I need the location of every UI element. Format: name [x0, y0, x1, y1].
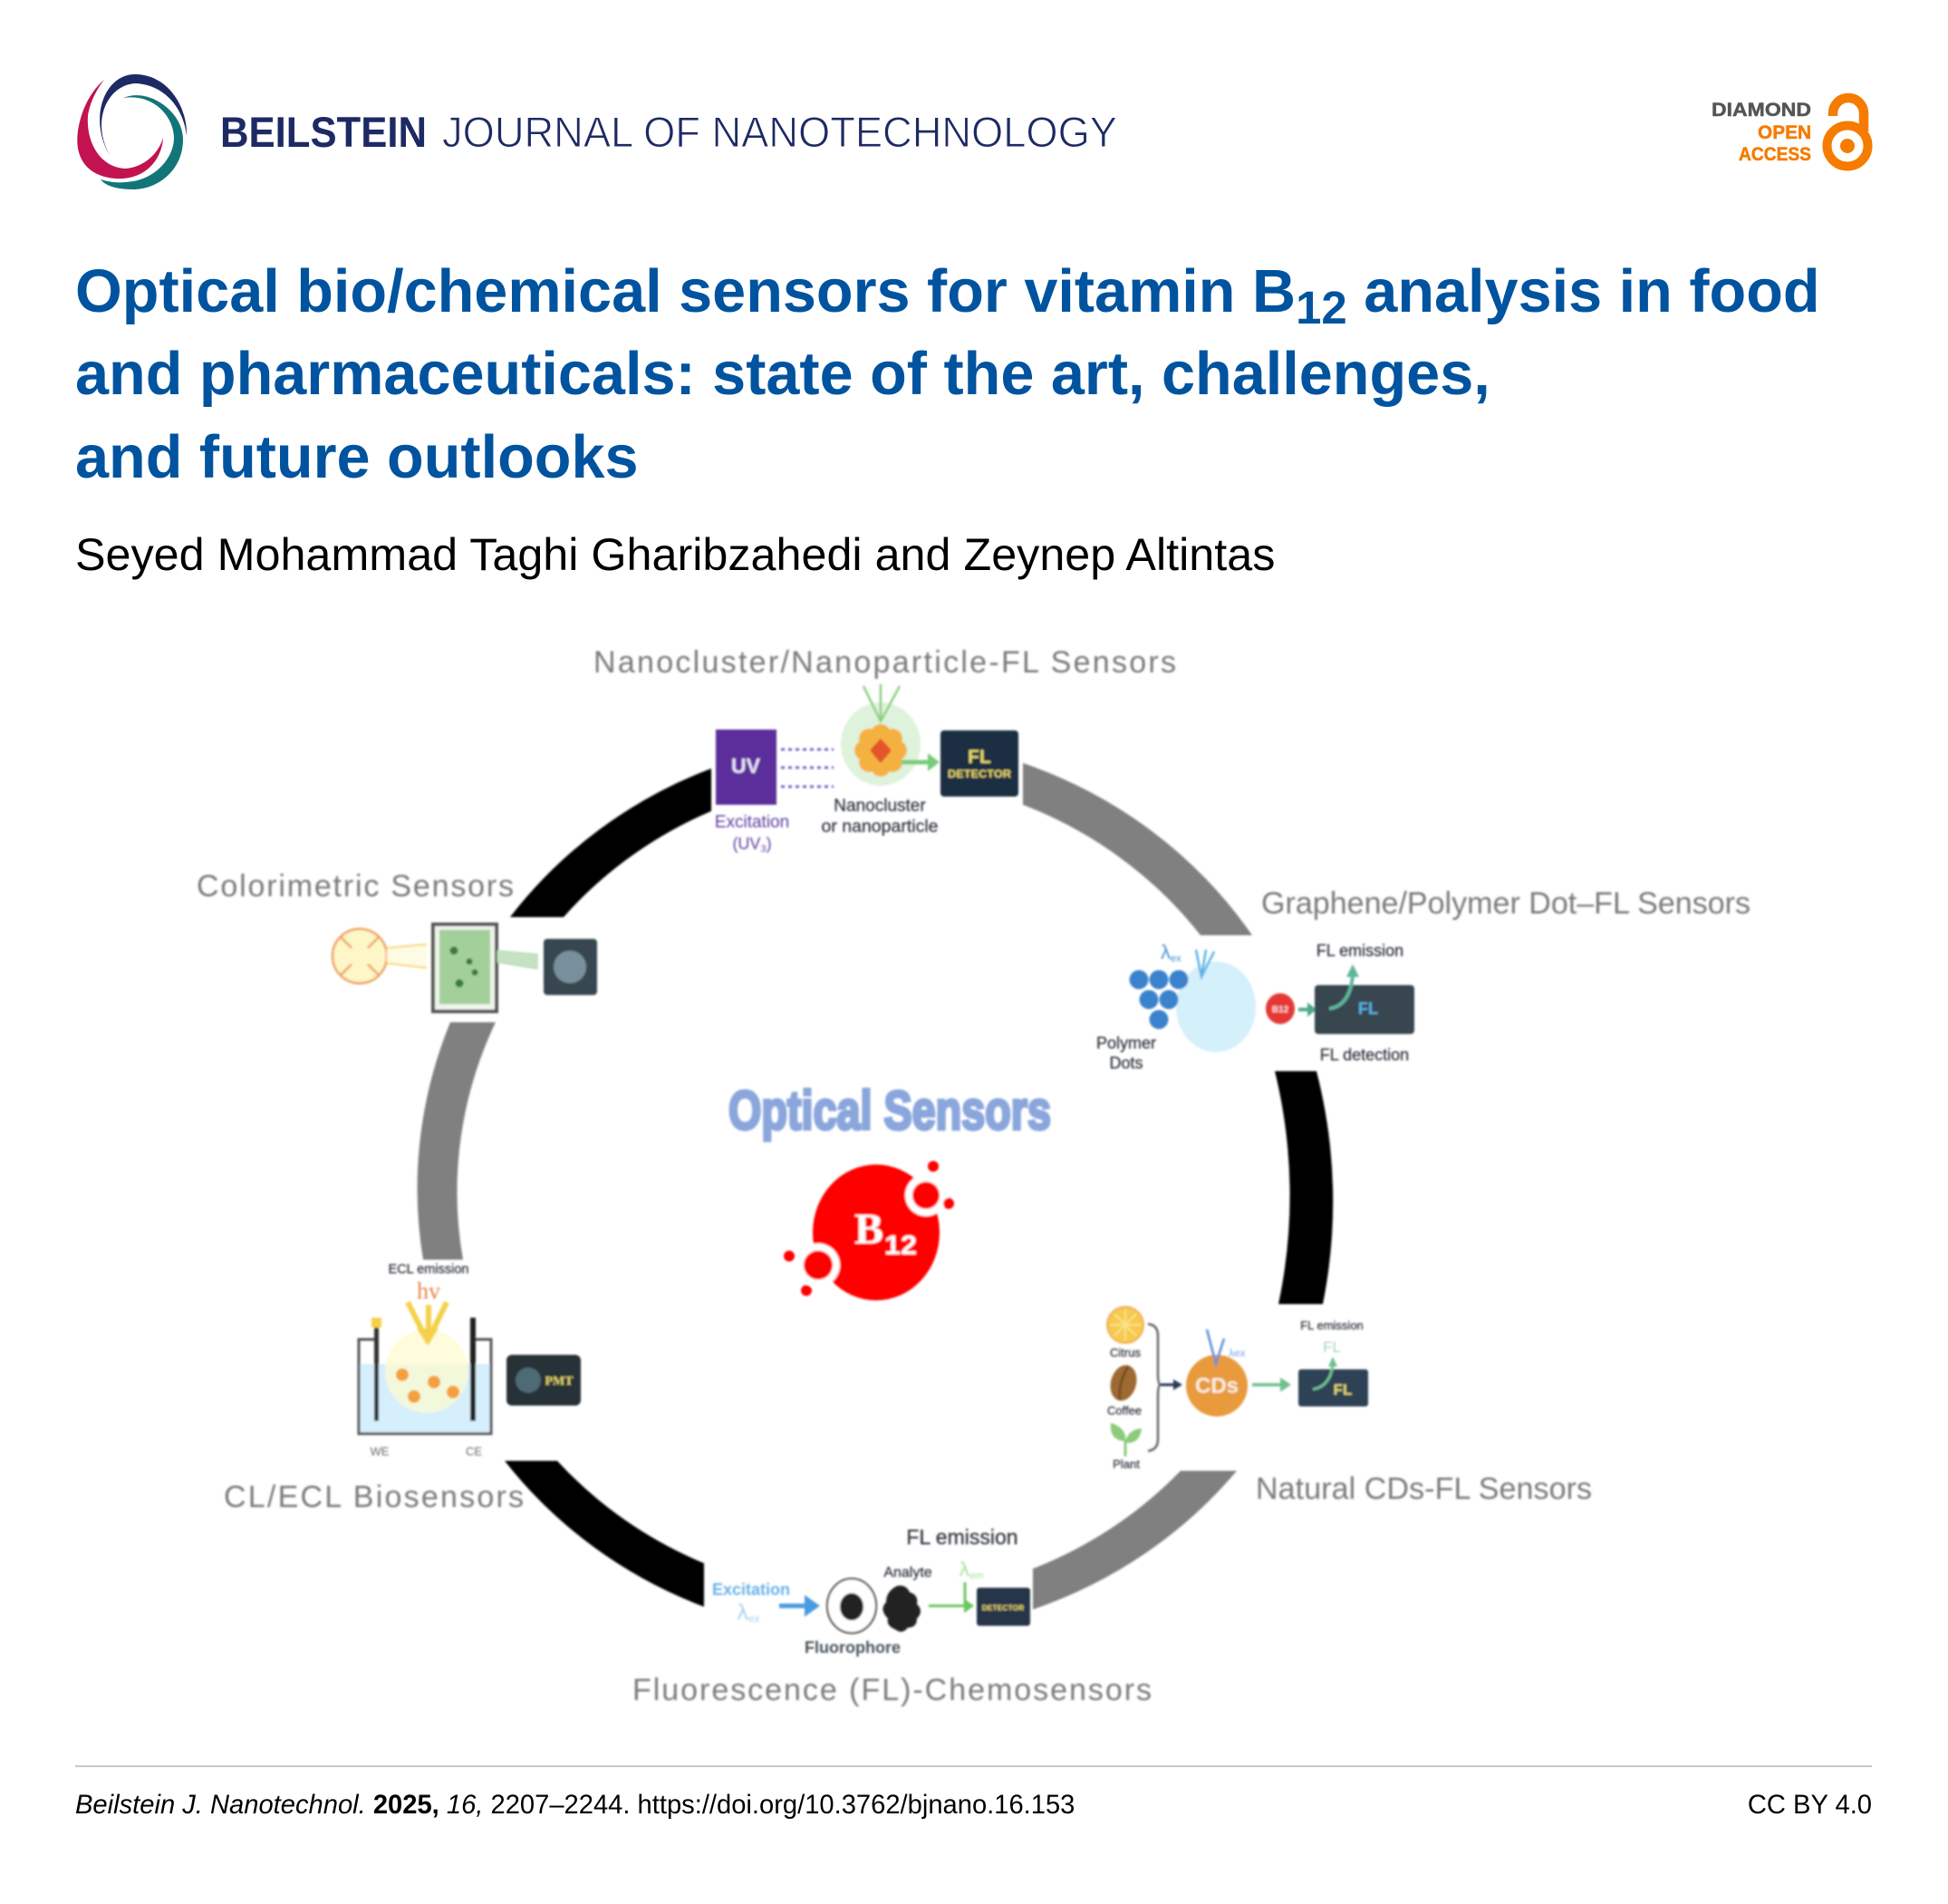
polymer droplet [1176, 962, 1256, 1052]
captions: or nanoparticle [821, 817, 939, 836]
emission captions: ECL emission [389, 1262, 468, 1277]
reagent particles [396, 1368, 459, 1403]
icon: citrus [1107, 1307, 1143, 1343]
ring segment: top left [510, 768, 711, 917]
captions: Excitation [715, 813, 789, 832]
polymer dots [1129, 970, 1189, 1029]
B12 marker [1266, 993, 1295, 1024]
emission captions: FL emission [1300, 1319, 1364, 1332]
source captions [1107, 1346, 1142, 1471]
captions: Dots [1109, 1054, 1143, 1072]
ring segment: bottom right [1033, 1471, 1237, 1609]
FL detector: DETECTOR [948, 768, 1011, 780]
captions [715, 797, 939, 855]
heading: Colorimetric Sensors [197, 869, 514, 904]
journal name: JOURNAL OF NANOTECHNOLOGY [442, 108, 1117, 156]
badge text: ACCESS [1739, 144, 1811, 165]
FL detector [1298, 1357, 1368, 1406]
heading: CL/ECL Biosensors [224, 1480, 524, 1514]
captions: FL emission [1316, 942, 1403, 960]
heading: Graphene/Polymer Dot–FL Sensors [1261, 886, 1750, 921]
captions: Polymer [1096, 1034, 1156, 1052]
light emission arrows [408, 1302, 447, 1346]
badge text: OPEN [1758, 122, 1811, 143]
emission captions: hv [417, 1278, 440, 1304]
emission captions: WE [371, 1445, 390, 1458]
CDs circle: CDs [1195, 1374, 1239, 1398]
ring segment: bottom left [505, 1461, 704, 1607]
title: and future outlooks [75, 424, 639, 491]
captions: FL emission [906, 1525, 1018, 1549]
luminescent glow [385, 1329, 468, 1413]
emission arrow [929, 1582, 974, 1613]
PMT detector [506, 1355, 581, 1406]
electrolyte [359, 1364, 491, 1434]
excitation label [712, 1580, 790, 1625]
title: analysis in food [1347, 258, 1820, 325]
citation: Beilstein J. Nanotechnol. 2025, 16, 2207–2244. https://doi.org/10.3762/bjnano.16.153 [75, 1791, 1075, 1820]
captions: ) [767, 835, 772, 853]
emission captions: CE [466, 1445, 482, 1458]
ring segment: left [418, 1022, 496, 1260]
excitation label: ex [748, 1612, 759, 1625]
panel: natural CDs sensors [1106, 1307, 1592, 1506]
detector [977, 1588, 1030, 1626]
cell walls [359, 1339, 491, 1434]
captions: 3 [760, 844, 767, 855]
captions: Nanocluster [834, 797, 926, 816]
excitation label: Excitation [712, 1580, 790, 1599]
excitation label and rays: λ [1161, 941, 1171, 963]
icon: coffee bean [1106, 1362, 1141, 1404]
excitation label: λ [738, 1600, 748, 1625]
authors: Seyed Mohammad Taghi Gharibzahedi and Zeynep Altintas [75, 528, 1275, 580]
badge text [1712, 100, 1811, 165]
captions: Analyte [883, 1565, 932, 1580]
B12 marker: B12 [1272, 1005, 1289, 1015]
arrow [1298, 1002, 1316, 1017]
panel: fluorescence chemosensors [632, 1525, 1152, 1707]
captions: Fluorophore [805, 1638, 901, 1657]
emission captions: FL [1323, 1339, 1341, 1356]
fluorophore [827, 1579, 876, 1633]
FL detector: FL [1358, 1000, 1378, 1018]
source captions: Plant [1113, 1457, 1140, 1471]
center heading: Optical Sensors [728, 1080, 1051, 1141]
UV source: UV [731, 754, 761, 778]
emission captions [371, 1262, 482, 1458]
captions [1096, 942, 1409, 1072]
captions: FL detection [1320, 1046, 1409, 1064]
ring segment: top right [1023, 763, 1252, 935]
icon: vitamin B12: B [854, 1205, 883, 1253]
title: and pharmaceuticals: state of the art, challenges, [75, 341, 1490, 408]
panel: colorimetric sensors [197, 869, 597, 1011]
source captions: Citrus [1110, 1346, 1141, 1359]
UV source [716, 730, 776, 805]
excitation label and rays [1161, 941, 1214, 977]
icon: open padlock [1827, 98, 1868, 167]
panel: nanocluster sensors [593, 645, 1176, 855]
bracket and arrow [1148, 1324, 1182, 1451]
excitation dotted rays [781, 749, 834, 787]
panel: graphene polymer dot sensors [1096, 886, 1750, 1072]
nanocluster [841, 684, 921, 786]
electrodes [371, 1318, 473, 1421]
source captions: Coffee [1107, 1404, 1142, 1417]
ring segment: right [1275, 1071, 1333, 1304]
FL detector [940, 730, 1018, 797]
heading: Natural CDs-FL Sensors [1256, 1472, 1592, 1506]
excitation arrow [779, 1595, 820, 1617]
lamp [333, 929, 387, 983]
FL detector [1315, 964, 1414, 1034]
diamond open access badge [1712, 98, 1868, 167]
analyte [882, 1586, 921, 1632]
FL detector: FL [968, 747, 991, 768]
transmitted beam [497, 951, 537, 969]
FL detector: FL [1334, 1381, 1352, 1398]
cuvette [433, 924, 497, 1011]
title: 12 [1296, 282, 1347, 333]
journal name: BEILSTEIN [220, 108, 427, 156]
PMT detector: PMT [545, 1375, 574, 1388]
captions: (UV [732, 835, 760, 853]
badge text: DIAMOND [1712, 100, 1811, 121]
title: Optical bio/chemical sensors for vitamin B [75, 258, 1296, 325]
icon: journal swirl logo [77, 74, 187, 189]
heading: Fluorescence (FL)-Chemosensors [632, 1673, 1152, 1707]
captions: λ [960, 1558, 969, 1580]
panel: CL/ECL biosensors [224, 1262, 581, 1514]
detector: DETECTOR [982, 1603, 1024, 1612]
CDs circle: λex [1229, 1347, 1246, 1359]
detector [544, 939, 597, 995]
light beam [387, 944, 427, 968]
captions [805, 1525, 1018, 1657]
footer rule [75, 1765, 1872, 1767]
diagram: optical sensor cycle [197, 645, 1750, 1707]
icon: vitamin B12 [784, 1161, 954, 1300]
captions: em [969, 1571, 983, 1581]
excitation label and rays: ex [1171, 953, 1181, 964]
heading: Nanocluster/Nanoparticle-FL Sensors [593, 645, 1176, 680]
arrow [1252, 1377, 1291, 1392]
emission arrow [902, 753, 940, 771]
icon: vitamin B12: 12 [884, 1231, 917, 1261]
emission captions [1300, 1319, 1364, 1356]
icon: plant [1111, 1423, 1142, 1456]
CDs circle [1186, 1329, 1248, 1416]
license: CC BY 4.0 [1748, 1791, 1872, 1820]
